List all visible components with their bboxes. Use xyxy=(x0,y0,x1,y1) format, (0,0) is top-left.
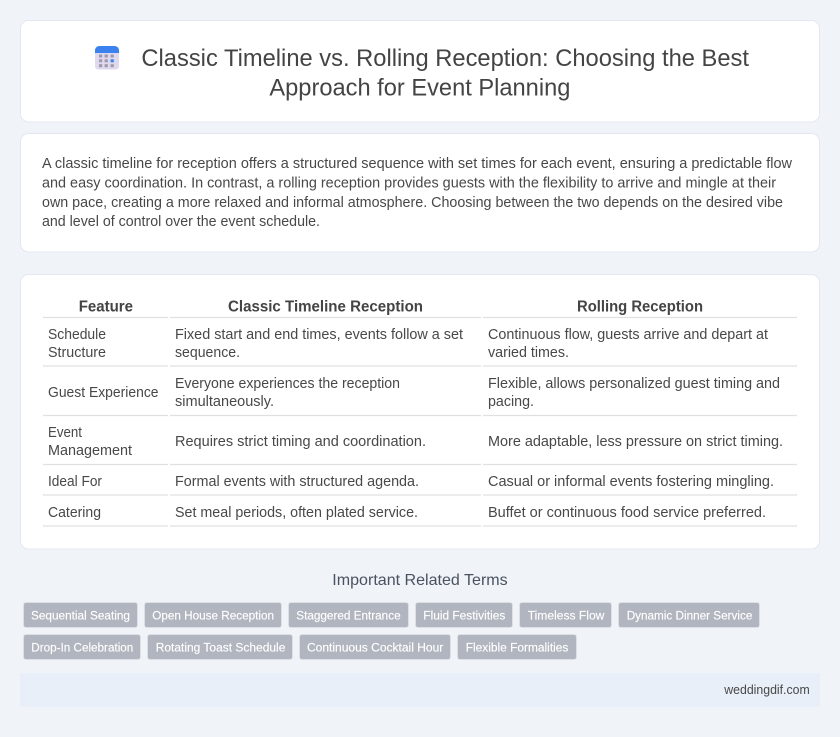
tag: flexible formalities xyxy=(458,634,576,660)
title: Classic Timeline vs. Rolling Reception: Choosing the Best xyxy=(141,45,749,72)
table row: guest experience: Everyone experiences the reception xyxy=(175,376,400,392)
panel: title header xyxy=(20,20,820,122)
tag: fluid festivities: Fluid Festivities xyxy=(423,608,505,622)
table row: schedule structure: sequence. xyxy=(175,345,240,361)
tag: drop-in celebration xyxy=(24,634,140,660)
tag: open house reception xyxy=(144,602,282,628)
table row: ideal for: Ideal For xyxy=(48,474,102,490)
table row: catering: Set meal periods, often plated service. xyxy=(175,505,418,521)
tag: open house reception: Open House Reception xyxy=(152,608,274,622)
table header row xyxy=(79,299,703,316)
tag: sequential seating: Sequential Seating xyxy=(31,608,130,622)
tag: rotating toast schedule xyxy=(148,634,292,660)
footer bar xyxy=(20,673,820,707)
title xyxy=(141,45,749,102)
table row: guest experience: simultaneously. xyxy=(175,394,274,410)
footer bar: weddingdif.com xyxy=(723,682,810,697)
icon: calendar xyxy=(95,46,119,70)
text block: introduction paragraph xyxy=(42,156,793,230)
tag: rotating toast schedule: Rotating Toast Schedule xyxy=(156,640,286,654)
tag: continuous cocktail hour xyxy=(300,634,450,660)
title: Approach for Event Planning xyxy=(269,74,570,102)
tag: dynamic dinner service xyxy=(618,602,760,628)
table row: schedule structure: Fixed start and end times, events follow a set xyxy=(175,327,463,343)
table row: ideal for xyxy=(48,474,774,490)
table row: ideal for: Formal events with structured agenda. xyxy=(175,474,419,490)
text block: introduction paragraph: own pace, creating a more relaxed and informal atmosphere. Choosing between the two depends on the desired vibe xyxy=(42,195,783,211)
text block: introduction paragraph: A classic timeline for reception offers a structured sequence with set times for each event, ensuring a predictable flow xyxy=(42,156,793,172)
table row: catering: Buffet or continuous food service preferred. xyxy=(488,505,766,521)
table row: guest experience: Guest Experience xyxy=(48,385,158,401)
text block: introduction paragraph: and level of control over the event schedule. xyxy=(42,214,320,230)
table row: catering xyxy=(48,505,766,521)
table row: event management: Event xyxy=(48,425,82,441)
table row: guest experience xyxy=(48,376,780,410)
table row: schedule structure: Schedule xyxy=(48,327,106,343)
panel: comparison table xyxy=(20,274,820,549)
table row: event management: Requires strict timing and coordination. xyxy=(175,434,426,450)
panel: introduction xyxy=(20,134,820,252)
tag: continuous cocktail hour: Continuous Cocktail Hour xyxy=(307,640,443,654)
tag: staggered entrance xyxy=(288,602,408,628)
tag: timeless flow xyxy=(520,602,612,628)
heading: important related terms: Important Related Terms xyxy=(332,572,508,589)
table header row: Feature xyxy=(79,299,133,316)
tag: staggered entrance: Staggered Entrance xyxy=(296,608,401,622)
tag: dynamic dinner service: Dynamic Dinner Service xyxy=(627,608,753,622)
table row: ideal for: Casual or informal events fostering mingling. xyxy=(488,474,774,490)
table row: guest experience: pacing. xyxy=(488,394,534,410)
table row: event management xyxy=(48,425,783,459)
table row: guest experience: Flexible, allows personalized guest timing and xyxy=(488,376,780,392)
tag: drop-in celebration: Drop-In Celebration xyxy=(31,640,133,654)
table row: event management: More adaptable, less pressure on strict timing. xyxy=(488,434,783,450)
table row: schedule structure: Structure xyxy=(48,345,106,361)
tag: fluid festivities xyxy=(416,602,512,628)
table row: catering: Catering xyxy=(48,505,101,521)
tag: sequential seating xyxy=(24,602,138,628)
tag: timeless flow: Timeless Flow xyxy=(528,608,605,622)
table row: schedule structure: Continuous flow, guests arrive and depart at xyxy=(488,327,768,343)
tag: flexible formalities: Flexible Formalities xyxy=(466,640,568,654)
table row: event management: Management xyxy=(48,443,132,459)
table header row: Classic Timeline Reception xyxy=(228,299,423,316)
table row: schedule structure: varied times. xyxy=(488,345,569,361)
table row: schedule structure xyxy=(48,327,768,361)
table header row: Rolling Reception xyxy=(577,299,703,316)
text block: introduction paragraph: and easy coordination. In contrast, a rolling reception provides guests with the flexibility to arrive and mingle at their xyxy=(42,176,776,192)
tag group: related terms xyxy=(24,602,760,660)
